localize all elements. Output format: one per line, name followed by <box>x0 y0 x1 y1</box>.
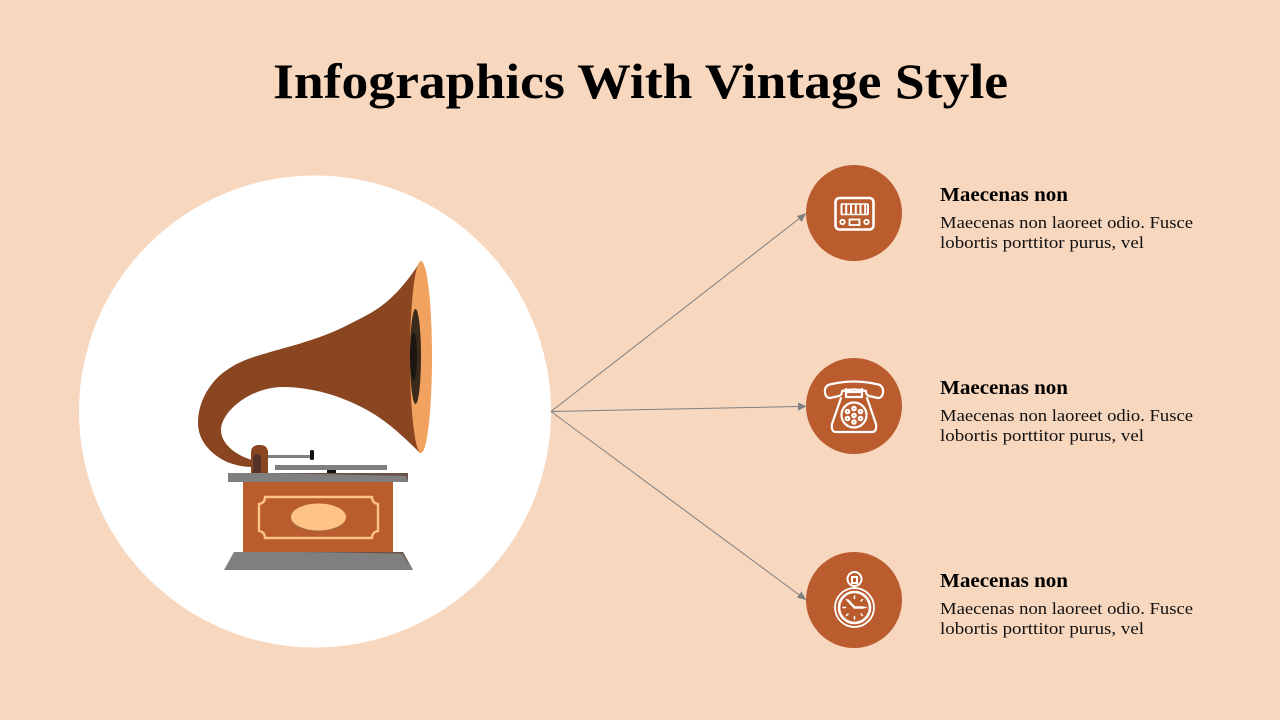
turntable platter <box>275 465 387 474</box>
description <box>940 599 1193 638</box>
heading: Maecenas non <box>940 184 1068 206</box>
description: Maecenas non laoreet odio. Fusce <box>940 599 1193 618</box>
decorative plate <box>259 497 378 538</box>
heading: Maecenas non <box>940 377 1068 399</box>
description: Maecenas non laoreet odio. Fusce <box>940 406 1193 425</box>
base <box>224 552 413 570</box>
icon: telephone <box>806 358 902 454</box>
item 1: radio <box>806 165 1193 261</box>
tonearm <box>251 445 314 473</box>
description: lobortis porttitor purus, vel <box>940 619 1144 638</box>
title: Infographics With Vintage Style <box>273 53 1008 109</box>
deck <box>228 473 408 482</box>
item 3: stopwatch <box>806 552 1193 648</box>
arrow to stopwatch item <box>551 412 806 600</box>
gramophone horn <box>198 261 432 467</box>
heading: Maecenas non <box>940 570 1068 592</box>
description: lobortis porttitor purus, vel <box>940 233 1144 252</box>
description <box>940 213 1193 252</box>
arrow to radio item <box>551 213 806 412</box>
item 2: telephone <box>806 358 1193 454</box>
gramophone illustration <box>198 261 432 570</box>
description <box>940 406 1193 445</box>
arrow to telephone item <box>551 402 806 412</box>
icon: radio <box>806 165 902 261</box>
description: lobortis porttitor purus, vel <box>940 426 1144 445</box>
white circle panel <box>79 176 551 648</box>
description: Maecenas non laoreet odio. Fusce <box>940 213 1193 232</box>
icon: stopwatch <box>806 552 902 648</box>
cabinet <box>243 482 393 552</box>
